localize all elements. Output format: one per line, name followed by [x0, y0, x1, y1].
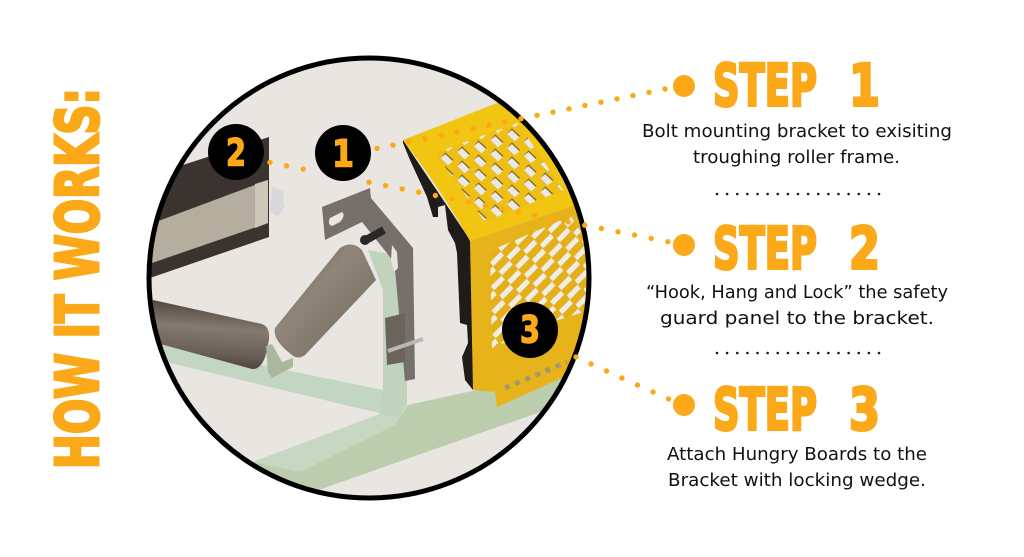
base beam [254, 378, 562, 490]
step 3 heading: STEP [713, 376, 817, 444]
step 3 description [667, 445, 927, 491]
step 3 heading: 3 [849, 376, 880, 444]
mesh: top panel [435, 123, 563, 222]
step 2 description: guard panel to the bracket. [660, 309, 934, 329]
circular product illustration [140, 50, 600, 510]
step 2 [646, 214, 948, 329]
dotted connector: step 2 [267, 160, 695, 256]
number badge 2 [208, 124, 264, 180]
step 3 [667, 376, 927, 491]
number badge 1: 1 [332, 132, 354, 176]
green diagonal strut [155, 343, 383, 414]
roller mount [266, 344, 293, 378]
number badge 3 [502, 302, 558, 358]
safety guard [403, 103, 600, 407]
step 2 heading: STEP [713, 214, 817, 282]
number badge 1 [315, 125, 371, 181]
step 3 description: Bracket with locking wedge. [668, 471, 926, 491]
dark adjacent panel [145, 137, 285, 278]
green upright [368, 250, 407, 417]
step 1 description [642, 122, 952, 168]
inclined roller [275, 244, 376, 358]
step 1 heading: STEP [713, 52, 817, 120]
mesh: side panel [490, 216, 592, 348]
number badge 3: 3 [520, 308, 540, 352]
step 1 heading: 1 [849, 52, 880, 120]
step 1 description: Bolt mounting bracket to exisiting [642, 122, 952, 142]
bracket bolt [388, 339, 423, 351]
dotted connector: step 1 [374, 75, 695, 151]
flat roller [153, 300, 269, 369]
step 3 description: Attach Hungry Boards to the [667, 445, 927, 465]
mounting bracket [322, 188, 423, 381]
step 1 description: troughing roller frame. [693, 148, 900, 168]
dotted connector: step 3 [557, 347, 695, 416]
circle outline [149, 58, 589, 498]
step 2 description [646, 283, 948, 329]
step 2 description: “Hook, Hang and Lock” the safety [646, 283, 948, 303]
step 1 [642, 52, 952, 168]
number badge 2: 2 [226, 132, 246, 174]
step 2 heading: 2 [849, 214, 880, 282]
